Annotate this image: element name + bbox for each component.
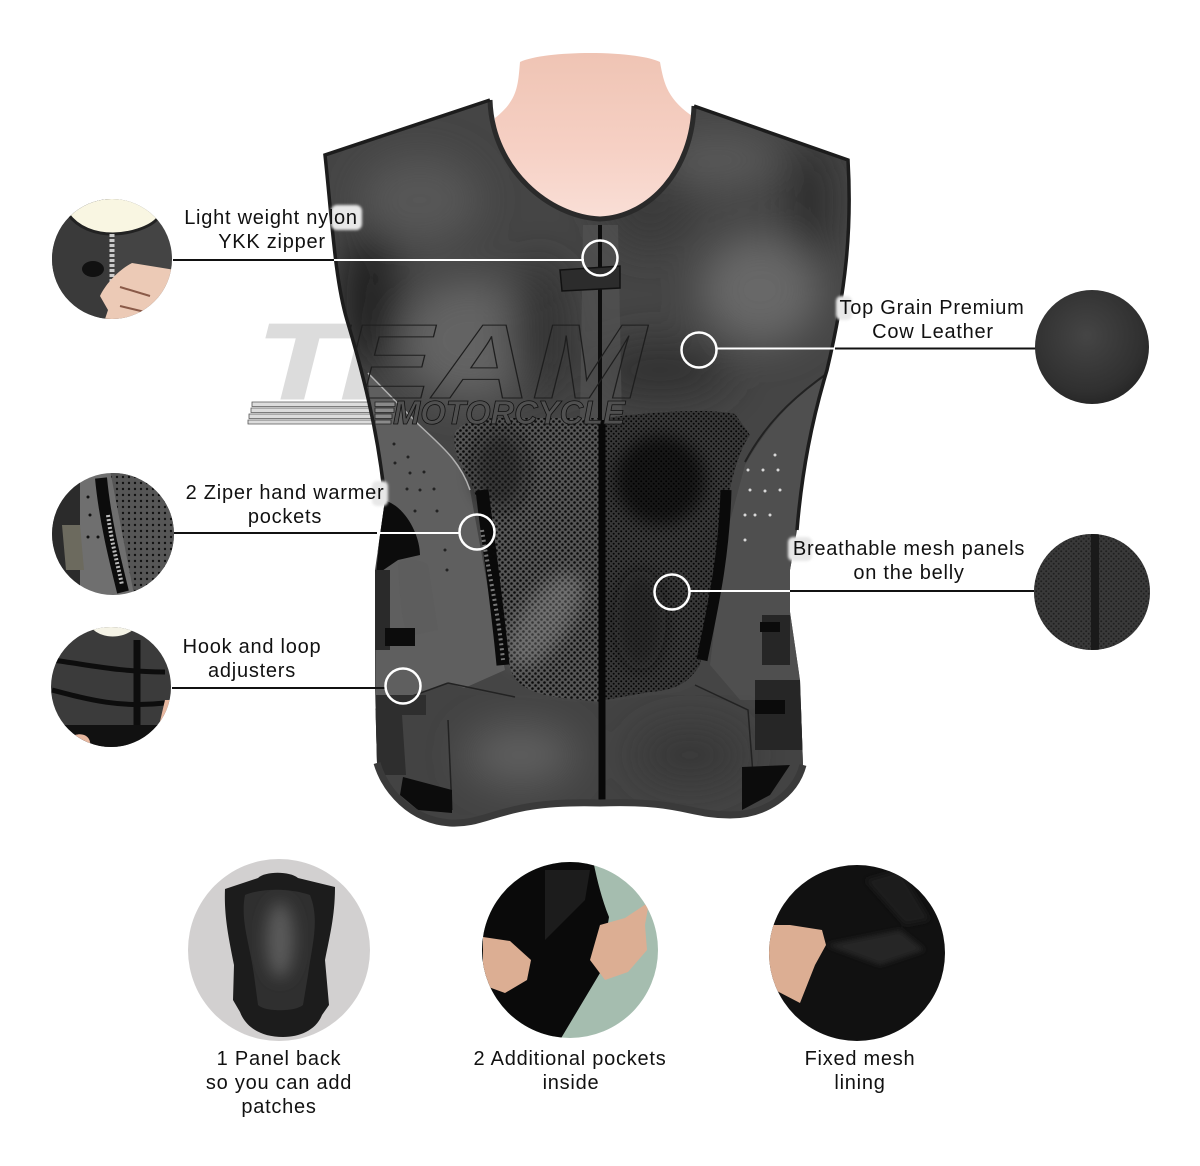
callout: zipper: Light weight nylon xyxy=(184,207,358,229)
side tab xyxy=(398,560,438,636)
callout: leather: Cow Leather xyxy=(872,321,994,343)
center placket xyxy=(580,225,622,420)
side panel left xyxy=(368,373,505,720)
straps left xyxy=(375,570,390,650)
panel: inside pockets: 2 Additional pockets xyxy=(474,1048,666,1070)
straps right xyxy=(755,615,803,750)
seam lines xyxy=(368,373,470,490)
panel: back of vest: patches xyxy=(241,1096,317,1118)
panel: inside pockets: inside xyxy=(543,1072,599,1094)
panel: inside pockets xyxy=(474,860,666,1094)
watermark: logo outline on vest xyxy=(350,324,649,425)
callout: adjusters: Hook and loop xyxy=(183,636,321,658)
callout: adjusters: adjusters xyxy=(208,660,296,682)
panel: back of vest xyxy=(188,859,370,1118)
callout: mesh: on the belly xyxy=(853,562,965,584)
panel: back of vest: so you can add xyxy=(206,1072,352,1094)
watermark: logo fill: TEAM xyxy=(258,303,649,421)
icon: leather grain detail xyxy=(1035,290,1149,404)
callout: zipper: YKK zipper xyxy=(218,231,326,253)
mesh panel right xyxy=(605,411,750,700)
callout: zipper xyxy=(173,205,618,276)
shading xyxy=(340,130,834,400)
icon: strap detail xyxy=(50,626,175,751)
panel: mesh lining: Fixed mesh xyxy=(805,1048,915,1070)
panel: mesh lining xyxy=(765,862,950,1094)
callout: leather: Top Grain Premium xyxy=(839,297,1025,319)
icon: mannequin neck xyxy=(495,53,695,225)
watermark: logo outline on vest: TEAM xyxy=(258,303,649,421)
watermark: logo outline on vest: MOTORCYCLE xyxy=(393,394,626,431)
icon: zipper detail xyxy=(50,197,175,322)
perforations xyxy=(392,442,448,572)
lower panels xyxy=(376,684,803,764)
leather vest xyxy=(320,90,860,830)
side zippers xyxy=(482,490,503,665)
callout: mesh xyxy=(654,537,1034,610)
side panel right xyxy=(710,375,825,700)
binding xyxy=(490,100,694,219)
zipper line xyxy=(598,225,602,420)
callout: pockets: 2 Ziper hand warmer xyxy=(186,482,384,504)
icon: belly mesh detail xyxy=(1034,534,1150,650)
velcro black left xyxy=(376,500,420,575)
callout: adjusters xyxy=(172,636,420,704)
callout: pockets: pockets xyxy=(248,506,322,528)
icon: pocket detail xyxy=(50,470,176,600)
panel: back of vest: 1 Panel back xyxy=(217,1048,342,1070)
callout: leather xyxy=(682,296,1036,368)
neck strap tab xyxy=(560,266,620,291)
mesh panel left xyxy=(454,418,600,702)
panel: mesh lining: lining xyxy=(834,1072,886,1094)
callout: mesh: Breathable mesh panels xyxy=(793,538,1025,560)
callout: pockets xyxy=(174,481,494,550)
